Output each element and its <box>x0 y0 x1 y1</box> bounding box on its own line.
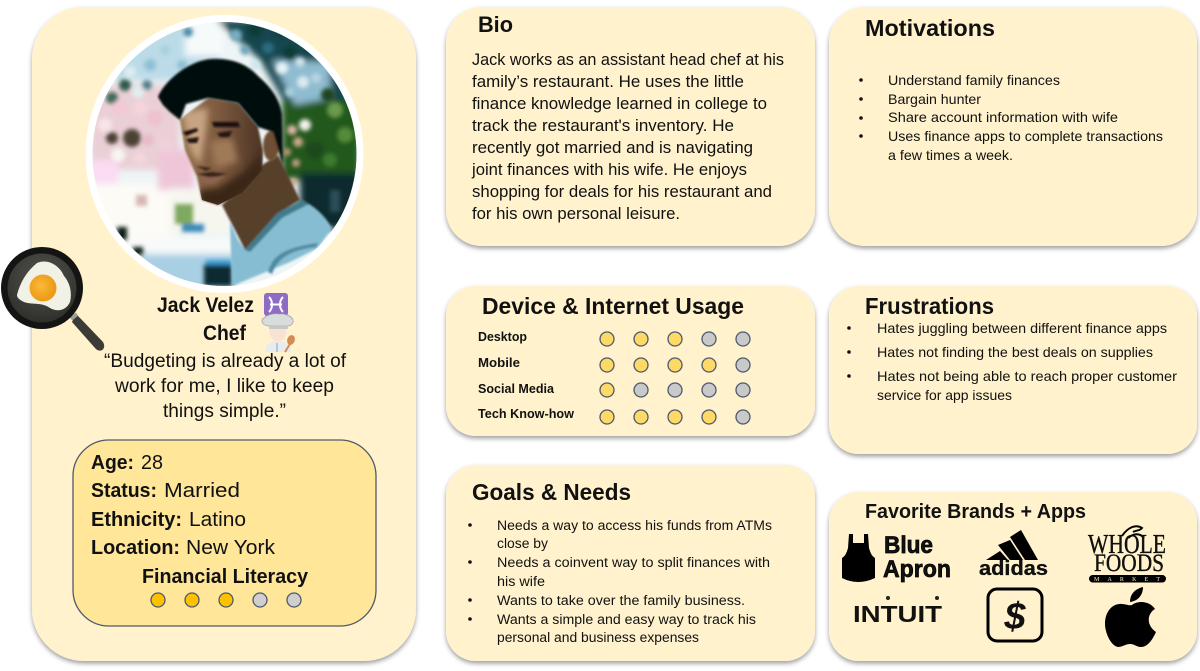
list: goals: personal and business expenses <box>497 630 699 645</box>
panel: demographics: Location: <box>91 536 180 559</box>
list: frustrations: Hates not being able to reach proper customer <box>877 368 1177 384</box>
list: goals <box>468 518 772 645</box>
rating dots: usage <box>600 332 750 424</box>
logo: Cash App: $ <box>1003 596 1026 638</box>
text: bio body: recently got married and is navigating <box>472 139 753 157</box>
text: bio body: shopping for deals for his restaurant and <box>472 183 772 201</box>
text: bio body: track the restaurant's inventory. He <box>472 117 734 135</box>
list: motivations: Share account information with wife <box>888 109 1118 125</box>
panel: goals and needs: Goals & Needs <box>472 479 631 505</box>
panel: demographics: Financial Literacy <box>142 565 309 588</box>
logo: Intuit <box>853 596 942 627</box>
text: bio body: for his own personal leisure. <box>472 205 680 223</box>
list: goals: close by <box>497 536 548 551</box>
logo: Intuit: INTUIT <box>853 601 942 627</box>
text: quote: “Budgeting is already a lot of <box>104 351 347 372</box>
panel: profile <box>1 7 416 661</box>
list: frustrations: service for app issues <box>877 387 1012 403</box>
panel: favorite brands and apps <box>829 492 1197 661</box>
list: motivations: Understand family finances <box>888 72 1060 88</box>
list: motivations <box>859 72 1163 163</box>
list: goals: Wants to take over the family business. <box>497 593 745 608</box>
list: motivations: Bargain hunter <box>888 91 981 107</box>
list: motivations: Uses finance apps to complete transactions <box>888 128 1163 144</box>
list: goals: Needs a way to access his funds from ATMs <box>497 518 772 533</box>
logo: Blue Apron: Apron <box>883 556 951 583</box>
panel: demographics <box>73 440 376 626</box>
text: bio body <box>471 51 784 223</box>
panel: device and internet usage: Device & Internet Usage <box>482 293 744 319</box>
text: bio body: joint finances with his wife. He enjoys <box>471 161 747 179</box>
panel: demographics: Latino <box>189 508 246 531</box>
list: frustrations <box>847 320 1177 403</box>
panel: motivations: Motivations <box>865 15 995 41</box>
logo: adidas <box>979 530 1048 580</box>
text: bio body: finance knowledge learned in college to <box>472 95 767 113</box>
logo: Blue Apron: Blue <box>884 532 933 559</box>
list: goals: Wants a simple and easy way to track his <box>497 612 756 627</box>
neck <box>222 155 300 250</box>
panel: favorite brands and apps: Favorite Brands + Apps <box>865 501 1086 523</box>
text: role: Chef <box>203 322 247 345</box>
icon: pisces sign <box>264 293 288 316</box>
panel: goals and needs <box>446 465 815 661</box>
text: bio body: Jack works as an assistant head chef at his <box>472 51 784 69</box>
panel: frustrations: Frustrations <box>865 293 994 319</box>
panel: demographics: Status: <box>91 479 157 502</box>
labels: usage categories: Desktop <box>478 330 527 344</box>
logo: Blue Apron <box>842 532 951 583</box>
panel: demographics: Married <box>164 479 240 502</box>
icon: chef <box>262 314 296 352</box>
logo: adidas: adidas <box>979 558 1048 580</box>
logo: Apple <box>1105 587 1156 647</box>
list: frustrations: Hates not finding the best deals on supplies <box>877 344 1153 360</box>
logo: Whole Foods Market: WHOLE <box>1088 529 1166 559</box>
labels: usage categories: Tech Know-how <box>478 407 574 421</box>
text: bio body: family’s restaurant. He uses the little <box>472 73 744 91</box>
photo: portrait of Jack <box>86 15 364 293</box>
panel: demographics: New York <box>186 536 276 559</box>
panel: demographics: Ethnicity: <box>91 508 182 531</box>
list: goals: his wife <box>497 574 545 589</box>
text: quote: things simple.” <box>163 401 286 422</box>
bokeh <box>98 23 353 286</box>
text: quote <box>104 351 347 422</box>
labels: usage categories: Social Media <box>478 382 555 396</box>
labels: usage categories <box>478 330 574 421</box>
panel: demographics: Age: <box>91 451 134 474</box>
list: motivations: a few times a week. <box>888 147 1013 163</box>
hair <box>158 59 283 165</box>
face <box>180 98 263 205</box>
labels: usage categories: Mobile <box>478 356 520 370</box>
text: quote: work for me, I like to keep <box>114 376 334 397</box>
panel: motivations <box>829 7 1197 246</box>
panel: demographics: 28 <box>141 451 163 474</box>
text: name: Jack Velez <box>157 294 254 317</box>
panel: frustrations <box>829 286 1197 454</box>
logo: Cash App <box>988 589 1042 641</box>
logo: Whole Foods Market: MARKET <box>1094 577 1160 583</box>
icon: frying pan with egg <box>1 247 104 351</box>
logo: Whole Foods Market: FOODS <box>1094 550 1164 577</box>
panel: bio <box>446 7 815 246</box>
shirt <box>230 200 332 286</box>
logo: Whole Foods Market <box>1088 526 1166 583</box>
list: goals: Needs a coinvent way to split finances with <box>497 555 770 570</box>
brows, eyes and mouth <box>183 122 240 136</box>
panel: bio: Bio <box>478 12 513 37</box>
rating: financial literacy <box>151 593 301 607</box>
list: frustrations: Hates juggling between different finance apps <box>877 320 1167 336</box>
panel: device and internet usage <box>446 286 815 436</box>
